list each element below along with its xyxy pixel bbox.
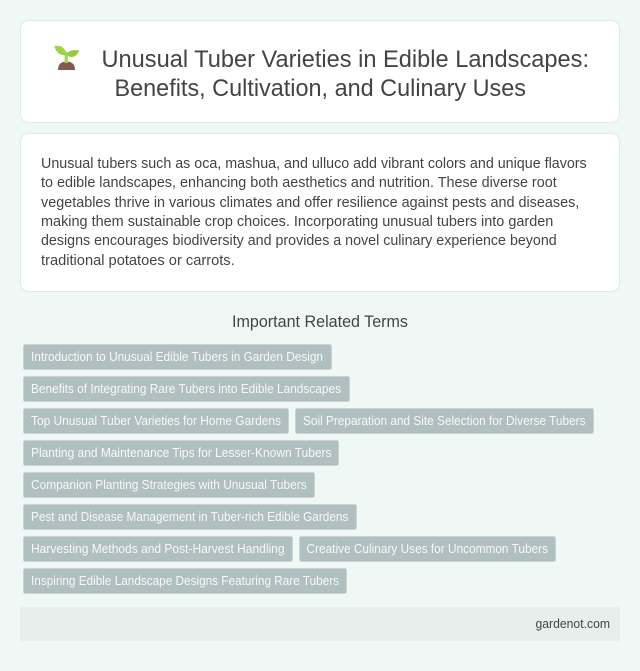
tag: introduction: Introduction to Unusual Edible Tubers in Garden Design (31, 350, 323, 364)
tag: planting and maintenance (24, 440, 338, 466)
heading: Important Related Terms: Important Related Terms (232, 313, 408, 331)
tag: soil preparation (296, 408, 594, 434)
tag: harvesting (24, 536, 292, 562)
text block: introduction paragraph: Unusual tubers such as oca, mashua, and ulluco add vibrant colors and unique flavors (41, 156, 587, 172)
tag list: related terms (24, 344, 594, 594)
panel: title header (20, 20, 620, 122)
tag: companion planting (24, 472, 314, 498)
icon: seedling (54, 46, 79, 70)
heading: title: Unusual Tuber Varieties in Edible Landscapes: (102, 46, 589, 73)
text block: introduction paragraph: traditional potatoes or carrots. (41, 253, 235, 269)
tag: introduction (24, 344, 332, 370)
tag: planting and maintenance: Planting and Maintenance Tips for Lesser-Known Tubers (31, 446, 332, 460)
tag: culinary uses: Creative Culinary Uses for Uncommon Tubers (306, 542, 548, 556)
tag: landscape designs (24, 568, 346, 594)
tag: pest and disease: Pest and Disease Management in Tuber-rich Edible Gardens (31, 510, 348, 524)
tag: culinary uses (300, 536, 556, 562)
tag: landscape designs: Inspiring Edible Landscape Designs Featuring Rare Tubers (31, 574, 339, 588)
heading: title: Benefits, Cultivation, and Culinary Uses (114, 75, 526, 102)
footer: gardenot.com (536, 616, 610, 631)
footer (20, 607, 620, 641)
text block: introduction paragraph: making them sustainable crop choices. Incorporating unusual tubers into garden (41, 214, 553, 230)
text block: introduction paragraph: vegetables thrive in various climates and offer resilience against pests and diseases, (41, 195, 579, 211)
text block: introduction paragraph: to edible landscapes, enhancing both aesthetics and nutrition. These diverse root (41, 175, 557, 191)
panel: introduction (20, 134, 620, 292)
tag: top varieties (24, 408, 288, 434)
heading: title (102, 46, 589, 102)
tag: harvesting: Harvesting Methods and Post-Harvest Handling (31, 542, 284, 556)
tag: soil preparation: Soil Preparation and Site Selection for Diverse Tubers (303, 414, 586, 428)
tag: pest and disease (24, 504, 356, 530)
text block: introduction paragraph: designs encourages biodiversity and provides a novel culinary experience beyond (41, 233, 557, 249)
tag: companion planting: Companion Planting Strategies with Unusual Tubers (31, 478, 307, 492)
text block: introduction paragraph (41, 156, 587, 269)
tag: benefits (24, 376, 350, 402)
tag: top varieties: Top Unusual Tuber Varieties for Home Gardens (31, 414, 281, 428)
tag: benefits: Benefits of Integrating Rare Tubers into Edible Landscapes (31, 382, 341, 396)
